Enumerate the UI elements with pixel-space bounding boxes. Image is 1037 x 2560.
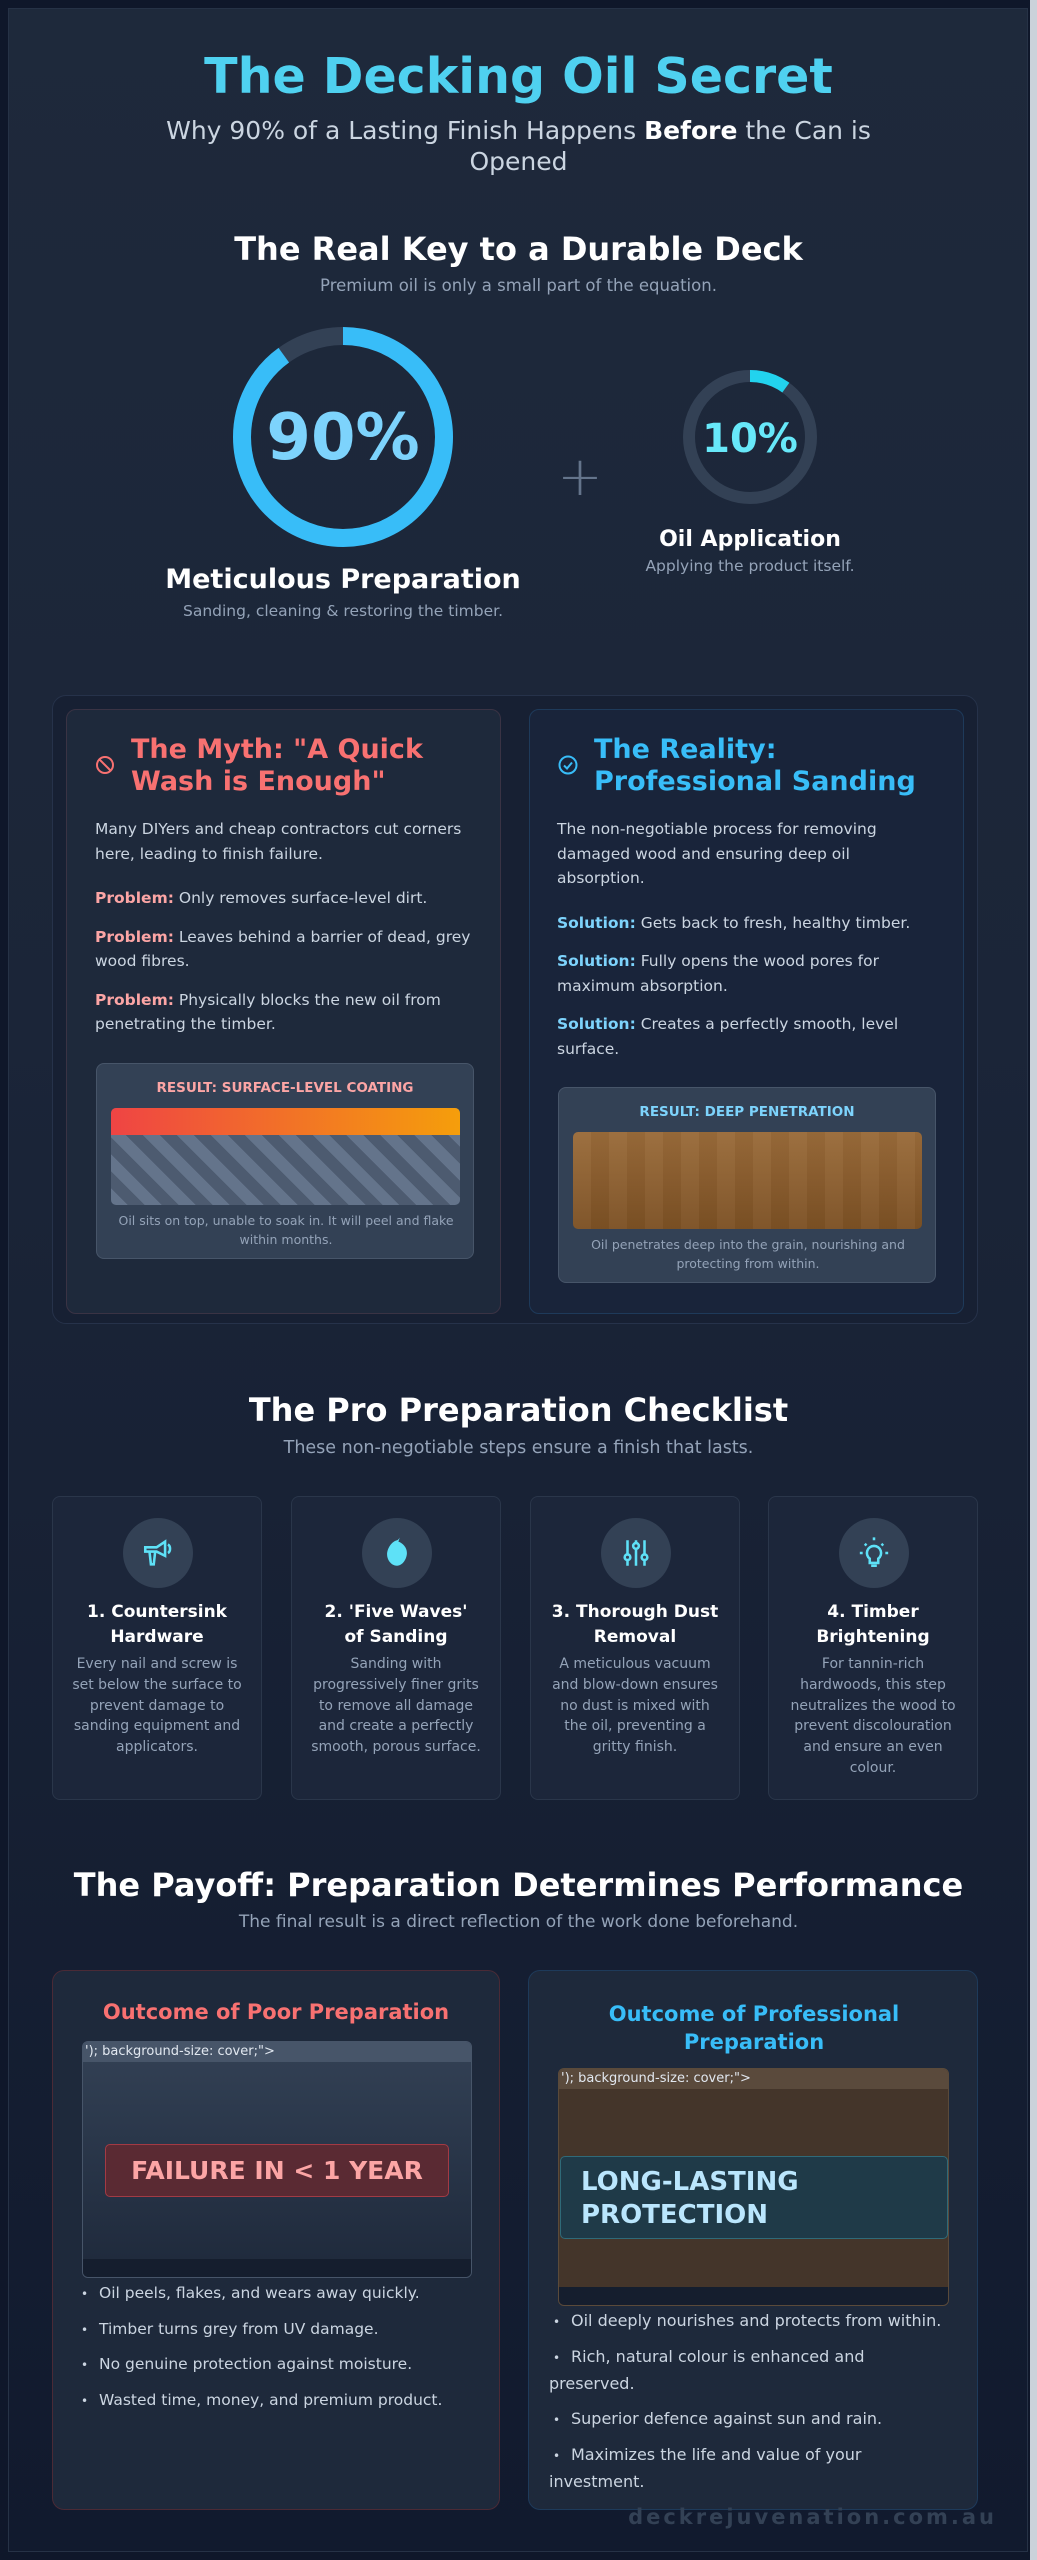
icon: prohibited	[96, 756, 114, 774]
image: failed deck	[82, 2041, 472, 2278]
heading: Outcome of Professional Preparation	[609, 2002, 899, 2054]
panel: professional preparation	[528, 1970, 978, 2510]
bullet list: Oil peels, flakes, and wears away quickly.	[99, 2284, 420, 2302]
label: oil application: Oil Application	[659, 527, 841, 552]
label: meticulous preparation: Meticulous Preparation	[165, 564, 521, 595]
card: brightening	[768, 1496, 978, 1800]
myth text: Problem: Only removes surface-level dirt.	[95, 889, 427, 907]
badge: failure: FAILURE IN < 1 YEAR	[131, 2156, 423, 2185]
icon: sliders	[601, 1518, 671, 1588]
label: oil application	[645, 527, 855, 575]
reality text: Solution: Fully opens the wood pores for maximum absorption.	[557, 952, 879, 994]
section heading: checklist: The Pro Preparation Checklist	[249, 1391, 788, 1429]
myth heading: The Myth: "A Quick Wash is Enough"	[131, 734, 423, 797]
card: five waves	[291, 1496, 501, 1800]
bullet list: Rich, natural colour is enhanced and preserved.	[549, 2347, 864, 2393]
footer url: deckrejuvenation.com.au	[628, 2505, 997, 2529]
myth text	[95, 820, 470, 1033]
reality text: Solution: Gets back to fresh, healthy timber.	[557, 914, 910, 932]
icon: megaphone	[123, 1518, 193, 1588]
label: oil application: Applying the product itself.	[645, 557, 855, 575]
icon: check	[558, 756, 578, 774]
card: dust removal	[530, 1496, 740, 1800]
plus sign: +	[557, 445, 603, 508]
card: brightening: 4. Timber Brightening	[816, 1602, 930, 1647]
result box: deep penetration: Oil penetrates deep into the grain, nourishing and protecting from within.	[591, 1237, 905, 1270]
image: healthy deck: '); background-size: cover;">	[561, 2071, 751, 2086]
card: countersink	[52, 1496, 262, 1800]
card: countersink: Every nail and screw is set below the surface to prevent damage to sanding equipment and applicators.	[72, 1656, 242, 1755]
result box: deep penetration	[558, 1087, 936, 1283]
diagram: oil layer on timber	[111, 1108, 460, 1205]
panel: reality	[529, 709, 964, 1314]
section heading: real key: The Real Key to a Durable Deck	[234, 230, 803, 268]
card: countersink: 1. Countersink Hardware	[87, 1602, 227, 1647]
result box: surface coating: RESULT: SURFACE-LEVEL COATING	[156, 1080, 414, 1096]
result box: surface coating: Oil sits on top, unable to soak in. It will peel and flake within months.	[118, 1213, 454, 1246]
bullet list	[82, 2284, 442, 2408]
card: dust removal: A meticulous vacuum and blow-down ensures no dust is mixed with the oil, preventing a gritty finish.	[552, 1656, 718, 1755]
badge: failure	[105, 2144, 449, 2197]
result box: surface coating	[96, 1063, 474, 1259]
panel: myth vs reality	[52, 695, 978, 1324]
reality text: The non-negotiable process for removing damaged wood and ensuring deep oil absorption.	[557, 820, 877, 887]
icon: lightbulb	[839, 1518, 909, 1588]
myth text: Problem: Leaves behind a barrier of dead, grey wood fibres.	[95, 928, 470, 970]
badge: long-lasting: LONG-LASTING	[581, 2167, 799, 2197]
title: The Decking Oil Secret	[204, 48, 833, 105]
subheading: These non-negotiable steps ensure a finish that lasts.	[284, 1438, 753, 1458]
diagram: oil soaked timber	[573, 1132, 922, 1229]
card: five waves: 2. 'Five Waves' of Sanding	[325, 1602, 467, 1647]
donut 90%: 90%	[266, 401, 420, 475]
badge: long-lasting: PROTECTION	[581, 2200, 768, 2230]
label: meticulous preparation	[165, 564, 521, 620]
image: healthy deck	[558, 2068, 949, 2306]
myth text: Problem: Physically blocks the new oil from penetrating the timber.	[95, 990, 441, 1033]
card: dust removal: 3. Thorough Dust Removal	[552, 1602, 718, 1647]
donut 90%	[233, 327, 453, 547]
panel: myth	[66, 709, 501, 1314]
donut 10%	[683, 370, 817, 504]
section heading: payoff: The Payoff: Preparation Determines Performance	[74, 1866, 963, 1904]
bullet list: Maximizes the life and value of your investment.	[549, 2445, 861, 2491]
label: meticulous preparation: Sanding, cleaning & restoring the timber.	[183, 602, 503, 620]
reality text	[556, 820, 910, 1058]
card: brightening: For tannin-rich hardwoods, this step neutralizes the wood to prevent discolouration and ensure an even colour.	[790, 1656, 956, 1776]
card: five waves: Sanding with progressively finer grits to remove all damage and create a perfectly smooth, porous surface.	[311, 1656, 481, 1755]
result box: deep penetration: RESULT: DEEP PENETRATION	[639, 1104, 855, 1120]
subheading: The final result is a direct reflection of the work done beforehand.	[239, 1912, 798, 1932]
reality text: Solution: Creates a perfectly smooth, level surface.	[557, 1015, 898, 1058]
icon: sanding block	[362, 1518, 432, 1588]
bullet list: Wasted time, money, and premium product.	[99, 2390, 442, 2408]
panel: poor preparation	[52, 1970, 500, 2510]
myth text: Many DIYers and cheap contractors cut corners here, leading to finish failure.	[95, 820, 461, 862]
bullet list: Superior defence against sun and rain.	[571, 2409, 882, 2428]
heading: Outcome of Poor Preparation	[103, 2000, 449, 2024]
bullet list: No genuine protection against moisture.	[99, 2355, 412, 2373]
bullet list	[549, 2311, 941, 2491]
reality heading: The Reality: Professional Sanding	[594, 734, 916, 797]
bullet list: Oil deeply nourishes and protects from within.	[571, 2311, 941, 2330]
subtitle: Why 90% of a Lasting Finish Happens Before the Can is Opened	[166, 116, 871, 176]
subheading: Premium oil is only a small part of the equation.	[320, 276, 717, 295]
donut 10%: 10%	[702, 416, 798, 462]
image: failed deck: '); background-size: cover;">	[85, 2044, 275, 2059]
badge: long-lasting	[560, 2156, 948, 2239]
bullet list: Timber turns grey from UV damage.	[99, 2320, 379, 2338]
